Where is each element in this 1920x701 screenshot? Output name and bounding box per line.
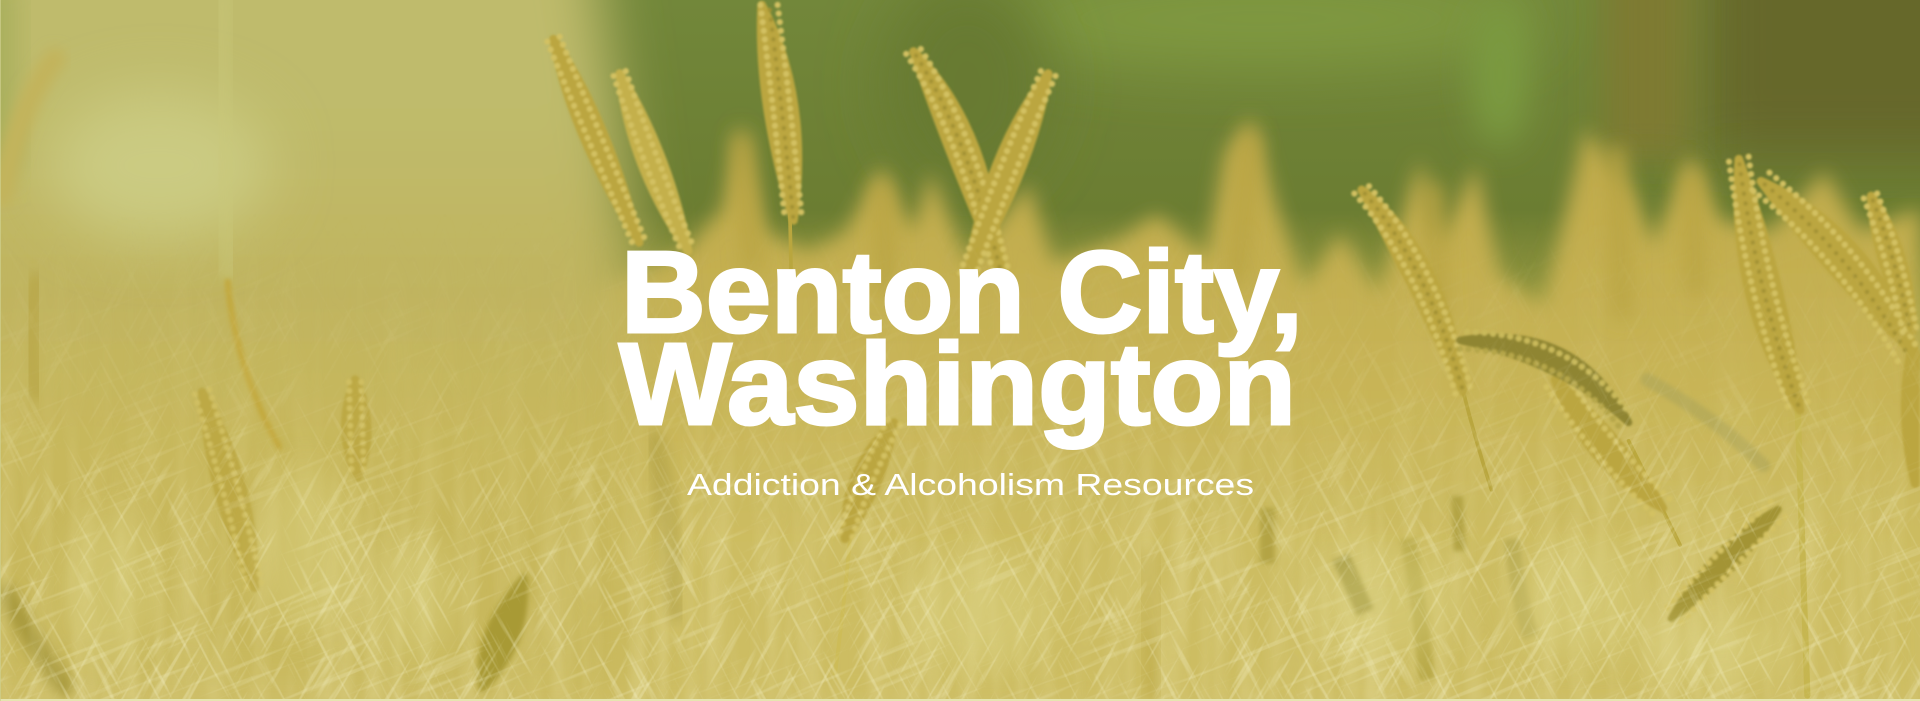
wheat stalks (790, 208, 1807, 696)
blurred background colour (882, 0, 1920, 196)
fine awns (0, 314, 1920, 699)
pale soft highlights (61, 465, 1788, 686)
title: Washington (619, 319, 1296, 449)
title: Benton City, (621, 227, 1303, 357)
subtitle: Addiction & Alcoholism Resources (687, 467, 1254, 502)
streak texture (1, 424, 1897, 699)
title (619, 227, 1303, 449)
